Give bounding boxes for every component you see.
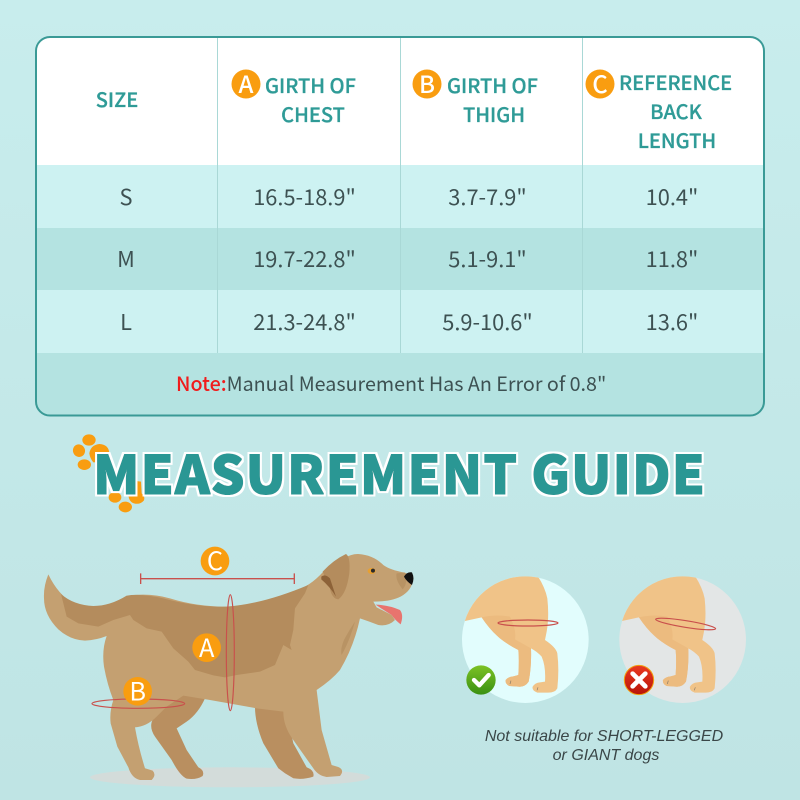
icon: cross bbox=[624, 665, 654, 695]
neck shading bbox=[341, 573, 406, 655]
row: size M: M bbox=[117, 243, 135, 274]
row: size L bbox=[120, 306, 698, 337]
far hind leg bbox=[151, 693, 205, 779]
row: size S: S bbox=[120, 181, 132, 212]
note: Note:Manual Measurement Has An Error of 0.8" bbox=[176, 368, 606, 397]
row: size S: 3.7-7.9" bbox=[448, 181, 527, 212]
caption: or GIANT dogs bbox=[553, 747, 659, 764]
badge A: A bbox=[199, 629, 215, 665]
caption: Not suitable for SHORT-LEGGED bbox=[485, 728, 724, 745]
header: girth of chest: GIRTH OF bbox=[265, 70, 356, 99]
row: size L: 21.3-24.8" bbox=[253, 306, 356, 337]
row: size S: 16.5-18.9" bbox=[253, 181, 356, 212]
header: size: SIZE bbox=[96, 84, 138, 113]
illustration: correct fit bbox=[457, 573, 589, 703]
row: size M: 19.7-22.8" bbox=[253, 243, 356, 274]
row: size L: L bbox=[120, 306, 132, 337]
back saddle marking bbox=[61, 585, 308, 677]
header: girth of thigh: GIRTH OF bbox=[447, 70, 538, 99]
header: reference back length: C bbox=[592, 65, 608, 100]
far front leg bbox=[255, 707, 314, 779]
caption bbox=[485, 728, 724, 764]
illustration: dog with measurement marks bbox=[44, 542, 413, 787]
header: reference back length bbox=[586, 65, 732, 154]
header: reference back length: LENGTH bbox=[638, 125, 716, 154]
nose bbox=[404, 572, 413, 585]
row: size L: 13.6" bbox=[646, 306, 698, 337]
header: reference back length: REFERENCE bbox=[619, 67, 732, 96]
row: size L: 5.9-10.6" bbox=[442, 306, 533, 337]
illustration: incorrect fit bbox=[614, 573, 746, 703]
row: size M: 11.8" bbox=[646, 243, 698, 274]
badge C bbox=[201, 542, 229, 578]
header: girth of chest: A bbox=[239, 65, 254, 100]
header: girth of thigh bbox=[412, 65, 538, 128]
row: size M bbox=[117, 243, 698, 274]
header: girth of thigh: B bbox=[419, 65, 435, 100]
eye bbox=[368, 568, 376, 574]
measure: back length bbox=[141, 573, 294, 584]
header: girth of chest: CHEST bbox=[281, 99, 345, 128]
header: girth of thigh: THIGH bbox=[463, 99, 525, 128]
panel: size table bbox=[36, 37, 764, 416]
measure: chest ring bbox=[226, 595, 234, 711]
tongue bbox=[376, 605, 402, 624]
title: MEASUREMENT GUIDE bbox=[93, 434, 705, 510]
header: girth of chest bbox=[232, 65, 356, 128]
row: size S: 10.4" bbox=[646, 181, 698, 212]
ear bbox=[323, 554, 350, 599]
row: size S bbox=[120, 181, 698, 212]
ground shadow bbox=[90, 767, 370, 787]
badge B: B bbox=[129, 672, 146, 708]
row: size M: 5.1-9.1" bbox=[448, 243, 527, 274]
icon: check bbox=[466, 665, 496, 695]
measure: thigh ring bbox=[92, 699, 185, 708]
header: reference back length: BACK bbox=[650, 96, 703, 125]
dog body bbox=[44, 554, 413, 780]
badge B bbox=[123, 672, 152, 708]
badge C: C bbox=[207, 542, 223, 578]
icon: paw decoration bbox=[71, 434, 144, 512]
badge A bbox=[192, 629, 221, 665]
